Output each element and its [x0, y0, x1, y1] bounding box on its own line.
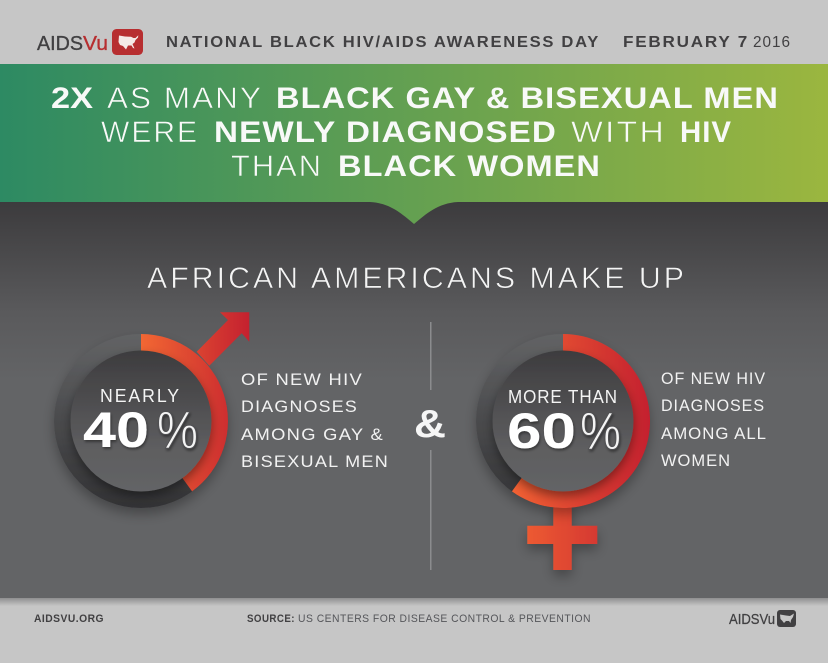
arrow of male symbol	[197, 312, 249, 366]
red arc 40 percent	[141, 334, 228, 491]
headline	[51, 82, 779, 183]
green banner with pointer	[0, 64, 828, 224]
headline: HIV	[680, 116, 732, 149]
headline: NEWLY DIAGNOSED	[214, 116, 557, 149]
male symbol chart: 40%	[54, 312, 249, 508]
footer source: US CENTERS FOR DISEASE CONTROL & PREVENTION	[298, 613, 591, 625]
label more than: MORE THAN	[508, 386, 618, 407]
text: men description	[241, 370, 389, 471]
value 40 percent: %	[157, 401, 198, 460]
inner disc	[70, 350, 212, 492]
ampersand: &	[414, 403, 446, 446]
footer band	[0, 598, 828, 663]
text: men description: BISEXUAL MEN	[241, 452, 389, 471]
value 60 percent: %	[580, 402, 621, 461]
headline: THAN	[231, 150, 323, 183]
header date: FEBRUARY 7	[623, 34, 749, 51]
text: men description: AMONG GAY &	[241, 425, 384, 444]
subheading: AFRICAN AMERICANS MAKE UP	[147, 262, 687, 295]
text: men description: DIAGNOSES	[241, 397, 358, 416]
logo: AIDSVu red: Vu	[83, 32, 108, 55]
text: women description	[661, 369, 767, 470]
text: men description: OF NEW HIV	[241, 370, 363, 389]
red arc 60 percent	[512, 334, 650, 508]
label nearly: NEARLY	[100, 385, 181, 406]
value 40 percent: 40	[83, 402, 149, 458]
header band	[0, 0, 828, 65]
text: women description: OF NEW HIV	[661, 369, 766, 388]
value 60 percent: 60	[507, 403, 576, 459]
headline: AS MANY	[107, 82, 263, 115]
headline: 2X	[51, 82, 93, 115]
headline: WITH	[571, 116, 666, 149]
center divider	[430, 322, 432, 570]
inner disc	[492, 350, 634, 492]
cross of female symbol	[527, 500, 597, 570]
logo: AIDSVu red	[37, 29, 143, 55]
main dark panel	[0, 202, 828, 599]
header title: NATIONAL BLACK HIV/AIDS AWARENESS DAY	[166, 34, 600, 51]
footer logo	[729, 610, 796, 628]
headline: WERE	[101, 116, 199, 149]
header date: 2016	[753, 34, 791, 51]
header date	[623, 34, 791, 51]
headline: BLACK GAY & BISEXUAL MEN	[276, 82, 779, 115]
female symbol chart: 60%	[476, 334, 650, 570]
footer logo: AIDSVu	[729, 612, 775, 628]
text: women description: DIAGNOSES	[661, 396, 765, 415]
value 40 percent	[83, 401, 198, 460]
footer url: AIDSVU.ORG	[34, 613, 104, 625]
logo: AIDSVu red: AIDS	[37, 32, 83, 55]
text: women description: WOMEN	[661, 451, 731, 470]
value 60 percent	[507, 402, 621, 461]
text: women description: AMONG ALL	[661, 424, 767, 443]
headline: BLACK WOMEN	[338, 150, 601, 183]
footer source: SOURCE:	[247, 613, 295, 625]
